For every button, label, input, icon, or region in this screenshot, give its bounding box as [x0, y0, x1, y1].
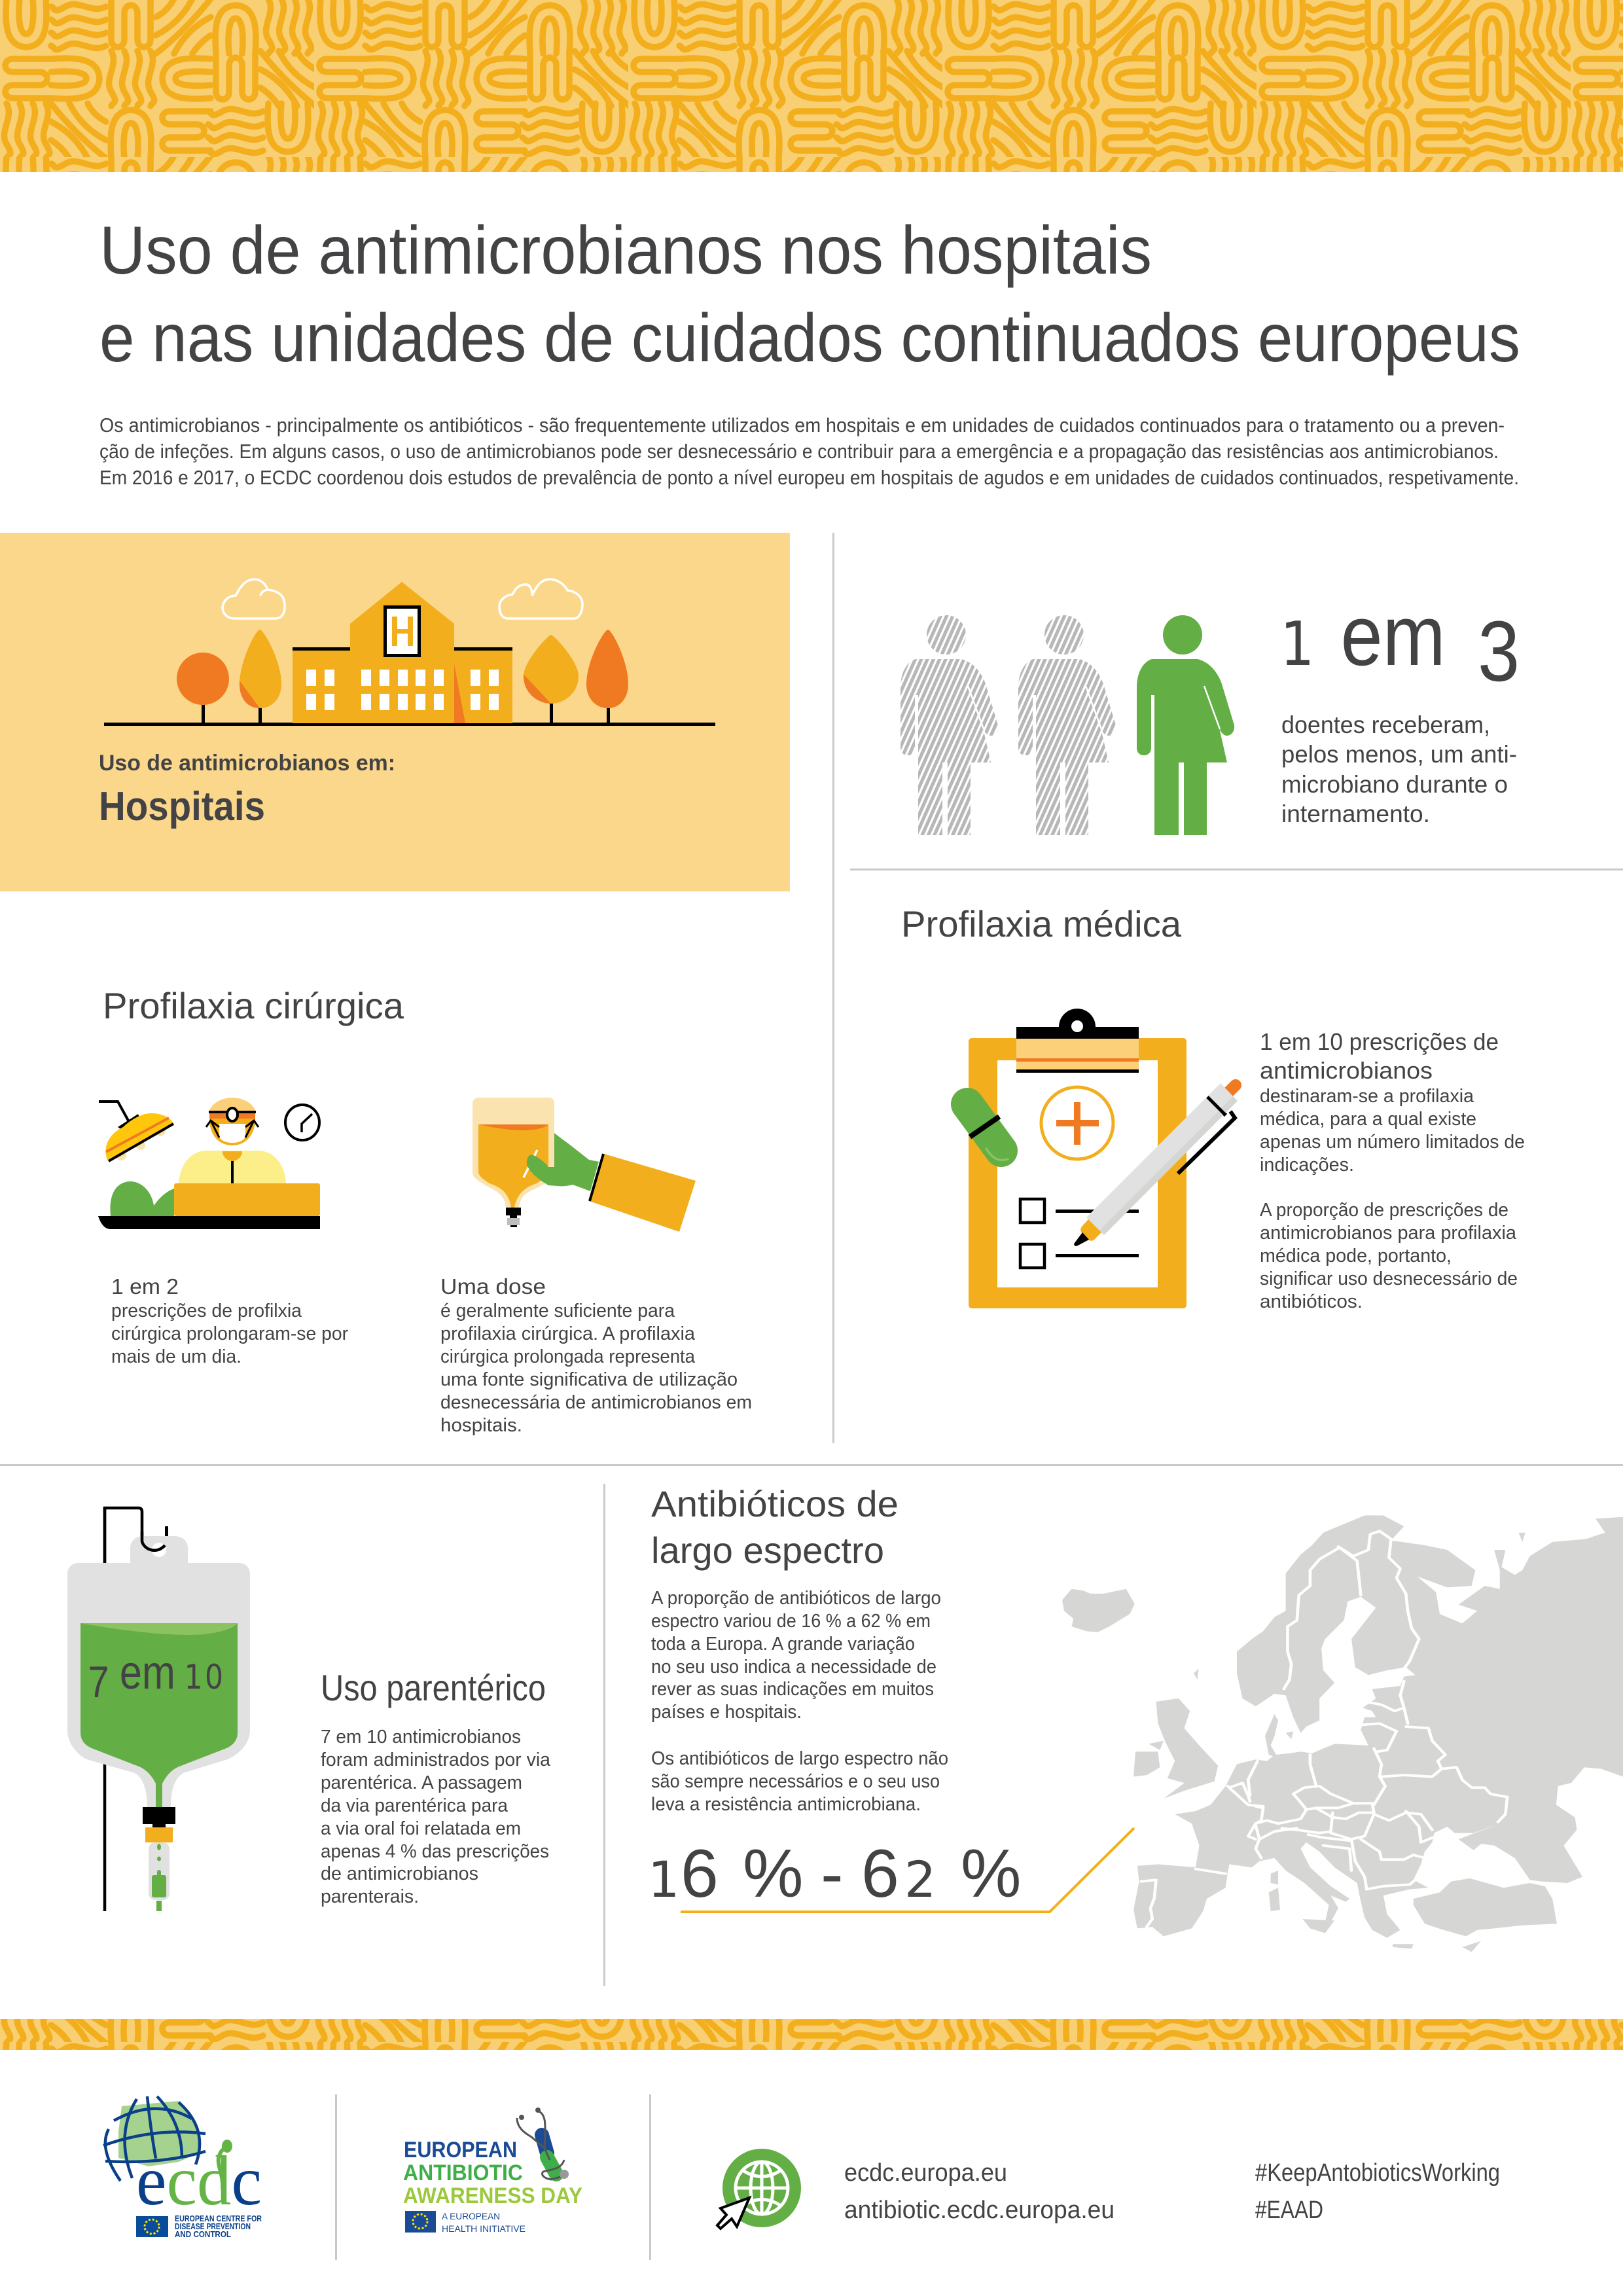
text: uso parentérico: da via parentérica para — [321, 1795, 508, 1816]
icon: hospital scene — [104, 579, 715, 726]
stat description: doentes receberam, — [1281, 711, 1490, 738]
icon: pill and stethoscope — [517, 2108, 569, 2179]
bottom pattern band — [0, 2019, 1623, 2050]
stat: 16 % - 62 %: 6 — [681, 1836, 719, 1912]
heading: antibióticos de largo espectro: largo espectro — [651, 1530, 884, 1571]
top pattern band — [0, 0, 1623, 172]
stat: 16 % - 62 %: 1 — [648, 1850, 679, 1909]
footer links: antibiotic.ecdc.europa.eu — [844, 2197, 1115, 2224]
stat: 7 em 10: 1 — [185, 1658, 203, 1697]
logo: ecdc: EUROPEAN CENTRE FOR — [175, 2214, 262, 2223]
title — [99, 213, 1520, 376]
stat: 16 % - 62 %: - — [821, 1836, 844, 1912]
text: uma dose — [440, 1274, 752, 1436]
intro text — [99, 414, 1519, 489]
text: profilaxia médica — [1260, 1028, 1525, 1312]
dividers — [0, 533, 1623, 2260]
footer links — [844, 2159, 1115, 2224]
footer hashtags: #KeepAntobioticsWorking — [1255, 2159, 1500, 2187]
text: uso parentérico: apenas 4 % das prescrições — [321, 1841, 549, 1862]
intro text: Em 2016 e 2017, o ECDC coordenou dois estudos de prevalência de ponto a nível europeu em hospitais de agudos e em unidades de cuidados continuados, respetivamente. — [99, 466, 1519, 489]
heading: profilaxia cirúrgica: Profilaxia cirúrgica — [103, 985, 404, 1026]
stat: 16 % - 62 %: 2 — [904, 1850, 936, 1909]
text: uso parentérico: foram administrados por via — [321, 1749, 551, 1770]
heading: uso parentérico: Uso parentérico — [321, 1667, 546, 1708]
text: uso parentérico: parenterais. — [321, 1886, 419, 1907]
footer links: ecdc.europa.eu — [844, 2159, 1007, 2187]
panel subtitle: Uso de antimicrobianos em: — [99, 751, 395, 776]
logo: european antibiotic awareness day — [403, 2108, 582, 2234]
text: antibióticos de largo espectro: Os antibióticos de largo espectro não — [651, 1748, 948, 1769]
icon: surgeon — [98, 1098, 320, 1229]
text: uso parentérico: de antimicrobianos — [321, 1863, 478, 1884]
text: 1 em 2: prescrições de profilxia — [111, 1300, 302, 1321]
text: profilaxia médica: antibióticos. — [1260, 1291, 1363, 1312]
text: antibióticos de largo espectro: rever as suas indicações em muitos — [651, 1679, 934, 1700]
stat description: microbiano durante o — [1281, 771, 1508, 798]
text: uma dose: desnecessária de antimicrobianos em — [440, 1392, 752, 1413]
text: uma dose: Uma dose — [440, 1274, 546, 1299]
text: profilaxia médica: indicações. — [1260, 1155, 1354, 1175]
panel: hospitals — [0, 533, 790, 891]
text: 1 em 2: mais de um dia. — [111, 1346, 241, 1367]
stat description — [1281, 711, 1517, 827]
heading: profilaxia médica: Profilaxia médica — [901, 903, 1182, 944]
text: antibióticos de largo espectro: são sempre necessários e o seu uso — [651, 1771, 940, 1792]
stat: 16 % - 62 %: % — [961, 1836, 1021, 1912]
text: uma dose: profilaxia cirúrgica. A profilaxia — [440, 1323, 696, 1344]
logo: ecdc — [103, 2096, 262, 2239]
text: uso parentérico: parentérica. A passagem — [321, 1772, 522, 1793]
text: antibióticos de largo espectro: espectro variou de 16 % a 62 % em — [651, 1611, 931, 1632]
stat: 1 em 3: 1 — [1280, 609, 1314, 679]
icon: hand holding iv bag — [473, 1098, 696, 1232]
text: uso parentérico — [321, 1727, 551, 1907]
icon: three people, one highlighted — [901, 615, 1234, 835]
text: profilaxia médica: significar uso desnecessário de — [1260, 1268, 1518, 1289]
stat: 1 em 3: 3 — [1478, 603, 1520, 700]
heading: antibióticos de largo espectro: Antibióticos de — [651, 1483, 899, 1524]
logo: european antibiotic awareness day: EUROPEAN — [404, 2138, 517, 2162]
title: e nas unidades de cuidados continuados europeus — [99, 300, 1520, 376]
text: uma dose: cirúrgica prolongada representa — [440, 1346, 696, 1367]
intro text: ção de infeções. Em alguns casos, o uso de antimicrobianos pode ser desnecessário e contribuir para a emergência e a propagação das resistências aos antimicrobianos. — [99, 440, 1499, 463]
logo: ecdc: DISEASE PREVENTION — [175, 2221, 251, 2231]
logo: european antibiotic awareness day: ANTIBIOTIC — [403, 2161, 523, 2185]
intro text: Os antimicrobianos - principalmente os antibióticos - são frequentemente utilizados em hospitais e em unidades de cuidados continuados para o tratamento ou a preven- — [99, 414, 1505, 437]
text: antibióticos de largo espectro: no seu uso indica a necessidade de — [651, 1657, 936, 1677]
footer hashtags — [1255, 2159, 1500, 2224]
stat: 1 em 3: em — [1341, 588, 1446, 684]
text: antibióticos de largo espectro: A proporção de antibióticos de largo — [651, 1588, 941, 1609]
icon: globe with cursor — [717, 2149, 801, 2229]
logo: european antibiotic awareness day: AWARENESS DAY — [403, 2183, 582, 2208]
text: antibióticos de largo espectro — [651, 1588, 948, 1815]
text: uso parentérico: 7 em 10 antimicrobianos — [321, 1727, 521, 1748]
stat: 7 em 10: 7 — [88, 1658, 109, 1707]
icon: clipboard with pill and pen — [967, 1009, 1238, 1308]
text: profilaxia médica: A proporção de prescrições de — [1260, 1200, 1508, 1221]
text: uma dose: uma fonte significativa de utilização — [440, 1369, 738, 1390]
logo: ecdc: AND CONTROL — [175, 2229, 231, 2239]
callout line to map — [681, 1828, 1134, 1912]
text: profilaxia médica: antimicrobianos — [1260, 1057, 1433, 1084]
text: 1 em 2: cirúrgica prolongaram-se por — [111, 1323, 348, 1344]
stat description: internamento. — [1281, 800, 1430, 827]
logo: european antibiotic awareness day: A EUROPEAN — [442, 2211, 500, 2221]
stat description: pelos menos, um anti- — [1281, 741, 1517, 768]
icon: large iv bag with stat — [67, 1508, 250, 1911]
title: Uso de antimicrobianos nos hospitais — [99, 213, 1152, 289]
text: 1 em 2 — [111, 1274, 348, 1367]
text: 1 em 2: 1 em 2 — [111, 1274, 179, 1299]
text: antibióticos de largo espectro: países e hospitais. — [651, 1702, 802, 1723]
map of Europe — [1062, 1515, 1623, 1952]
stat: 7 em 10: 0 — [205, 1658, 223, 1697]
logo: european antibiotic awareness day: HEALTH INITIATIVE — [442, 2223, 526, 2234]
text: profilaxia médica: médica, para a qual existe — [1260, 1109, 1476, 1130]
text: uso parentérico: a via oral foi relatada em — [321, 1818, 521, 1839]
stat: 16 % - 62 %: 6 — [861, 1836, 899, 1912]
text: antibióticos de largo espectro: toda a Europa. A grande variação — [651, 1634, 915, 1655]
panel heading: Hospitais — [99, 784, 265, 829]
stat: 7 em 10: em — [120, 1647, 175, 1699]
text: antibióticos de largo espectro: leva a resistência antimicrobiana. — [651, 1794, 921, 1815]
text: profilaxia médica: médica pode, portanto, — [1260, 1246, 1452, 1266]
text: uma dose: hospitais. — [440, 1415, 522, 1436]
text: profilaxia médica: destinaram-se a profilaxia — [1260, 1086, 1474, 1107]
logo: ecdc: ecdc — [136, 2142, 262, 2220]
text: profilaxia médica: apenas um número limitados de — [1260, 1132, 1525, 1153]
footer hashtags: #EAAD — [1255, 2197, 1323, 2224]
stat: 16 % - 62 %: % — [743, 1836, 803, 1912]
text: profilaxia médica: antimicrobianos para profilaxia — [1260, 1223, 1517, 1244]
text: profilaxia médica: 1 em 10 prescrições de — [1260, 1028, 1499, 1055]
heading: antibióticos de largo espectro — [651, 1483, 899, 1571]
text: uma dose: é geralmente suficiente para — [440, 1300, 675, 1321]
